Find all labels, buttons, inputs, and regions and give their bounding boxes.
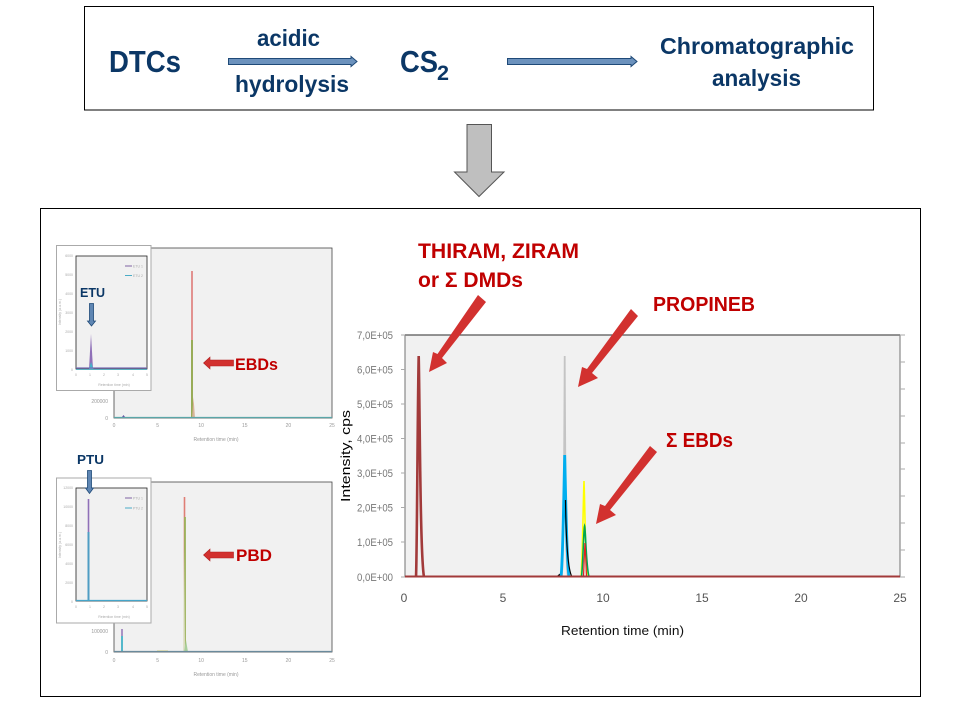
inset: PTU chromatogram: 4000 [65, 562, 73, 566]
y labels: 5,0E+05 [357, 399, 393, 411]
x labels: 0 [401, 591, 408, 605]
chart: EBDs chromatogram: 20 [286, 423, 291, 429]
chart: EBDs chromatogram: 25 [329, 423, 335, 429]
inset: ETU chromatogram: 0 [71, 368, 73, 372]
inset: PTU chromatogram: 2000 [65, 581, 73, 585]
arrow: PTU arrow [86, 470, 94, 494]
chart: main chromatogram [338, 330, 907, 638]
inset: PTU chromatogram: 5 [146, 605, 148, 609]
chart: PBD chromatogram: 15 [242, 658, 248, 664]
text: Chromatographic analysis: Chromatographic [660, 33, 854, 59]
x labels [401, 591, 907, 605]
inset: PTU chromatogram: Retention time (min) [98, 615, 130, 619]
label: PBD with arrow [204, 546, 272, 565]
chart: PBD chromatogram: 10 [198, 658, 204, 664]
x labels: 15 [695, 591, 709, 605]
y labels [357, 330, 393, 584]
text: CS2: CS [400, 44, 438, 79]
inset: PTU chromatogram: 3 [117, 605, 119, 609]
inset: ETU chromatogram: 1 [89, 373, 91, 377]
inset: ETU chromatogram [56, 246, 151, 390]
label: THIRAM, ZIRAM or DMDs: or Σ DMDs [418, 269, 523, 292]
inset: ETU chromatogram: 2 [103, 373, 105, 377]
label: THIRAM, ZIRAM or DMDs [418, 240, 579, 292]
inset: PTU chromatogram: 10000 [63, 505, 73, 509]
chart: EBDs chromatogram: 5 [156, 423, 159, 429]
chart: PBD chromatogram: Retention time (min) [193, 672, 239, 678]
peaks [562, 356, 568, 577]
y labels: 4,0E+05 [357, 434, 393, 446]
text: CS2: 2 [437, 62, 449, 85]
y labels: 0,0E+00 [357, 572, 393, 584]
arrow: to EBDs peak [596, 446, 657, 524]
y labels: 2,0E+05 [357, 502, 393, 514]
arrow: hydrolysis arrow [228, 56, 357, 66]
label: EBDs with arrow [204, 355, 278, 374]
inset: ETU chromatogram: 6000 [65, 254, 73, 258]
chart: PBD chromatogram: 25 [329, 658, 335, 664]
chart: PBD chromatogram: 5 [156, 658, 159, 664]
chart: EBDs chromatogram: 10 [198, 423, 204, 429]
chart: PBD chromatogram: 0 [113, 658, 116, 664]
label: EBDs with arrow: EBDs [235, 355, 278, 374]
inset: PTU chromatogram: 2 [103, 605, 105, 609]
inset: ETU chromatogram: 0 [75, 373, 77, 377]
y labels: 1,0E+05 [357, 537, 393, 549]
arrow: ETU arrow [88, 304, 96, 326]
text: acidic: acidic [257, 25, 320, 51]
label: PROPINEB: PROPINEB [653, 294, 755, 316]
axis title: Retention time: Retention time (min) [561, 623, 684, 638]
x labels: 10 [596, 591, 610, 605]
label: ETU: ETU [80, 286, 105, 300]
text: Chromatographic analysis [660, 33, 854, 91]
label: PTU: PTU [77, 453, 104, 467]
inset: PTU chromatogram: 8000 [65, 524, 73, 528]
inset: ETU chromatogram: Retention time (min) [98, 383, 130, 387]
chart: PBD chromatogram: 0 [105, 650, 108, 656]
chart: EBDs chromatogram: 200000 [91, 399, 108, 405]
x labels: 5 [500, 591, 507, 605]
panel: reaction scheme [84, 6, 874, 110]
axis title: Intensity: Intensity, cps [338, 409, 353, 502]
inset: PTU chromatogram: 6000 [65, 543, 73, 547]
inset: ETU chromatogram: ETU 2 [133, 274, 143, 278]
inset: PTU chromatogram: 12000 [63, 486, 73, 490]
text: Chromatographic analysis: analysis [712, 65, 801, 91]
chart: EBDs chromatogram: 0 [105, 416, 108, 422]
inset: PTU chromatogram: 4 [132, 605, 134, 609]
inset: ETU chromatogram: Intensity (a.u.m.) [58, 299, 62, 325]
inset: ETU chromatogram: 3000 [65, 311, 73, 315]
label: sum EBDs: Σ EBDs [666, 430, 733, 452]
inset: PTU chromatogram: 1 [89, 605, 91, 609]
inset: ETU chromatogram: 2000 [65, 330, 73, 334]
x labels: 20 [794, 591, 808, 605]
chart: EBDs chromatogram [91, 248, 335, 443]
inset: PTU chromatogram [56, 478, 151, 623]
arrow: analysis arrow [508, 56, 637, 66]
text: hydrolysis: hydrolysis [235, 71, 349, 97]
chart: PBD chromatogram [91, 482, 335, 678]
inset: PTU chromatogram: 0 [75, 605, 77, 609]
inset: PTU chromatogram: PTU 1 [133, 496, 143, 500]
y ticks [401, 335, 905, 577]
inset: ETU chromatogram: 5 [146, 373, 148, 377]
y labels: 6,0E+05 [357, 364, 393, 376]
panel: chromatograms [40, 208, 920, 696]
y labels: 3,0E+05 [357, 468, 393, 480]
chart: PBD chromatogram: 20 [286, 658, 291, 664]
label: THIRAM, ZIRAM or DMDs: THIRAM, ZIRAM [418, 240, 579, 263]
chart: EBDs chromatogram: Retention time (min) [193, 437, 239, 443]
arrow: to propineb peak [578, 309, 638, 387]
arrow: to DMD peak [429, 295, 486, 372]
chart: EBDs chromatogram: 15 [242, 423, 248, 429]
chart: EBDs chromatogram: 0 [113, 423, 116, 429]
inset: ETU chromatogram: 4 [132, 373, 134, 377]
inset: PTU chromatogram: PTU 2 [133, 506, 143, 510]
text: DTCs: DTCs [109, 44, 181, 79]
x labels: 25 [893, 591, 907, 605]
chart: PBD chromatogram: 100000 [91, 629, 108, 635]
inset: PTU chromatogram: Intensity (a.u.m.) [58, 532, 62, 558]
inset: ETU chromatogram: 4000 [65, 292, 73, 296]
label: PBD with arrow: PBD [236, 546, 272, 565]
arrow: gray down arrow [454, 124, 504, 196]
inset: ETU chromatogram: ETU 1 [133, 264, 143, 268]
inset: PTU chromatogram: 0 [71, 600, 73, 604]
inset: ETU chromatogram: 1000 [65, 349, 73, 353]
inset: ETU chromatogram: 5000 [65, 273, 73, 277]
y labels: 7,0E+05 [357, 330, 393, 342]
inset: ETU chromatogram: 3 [117, 373, 119, 377]
